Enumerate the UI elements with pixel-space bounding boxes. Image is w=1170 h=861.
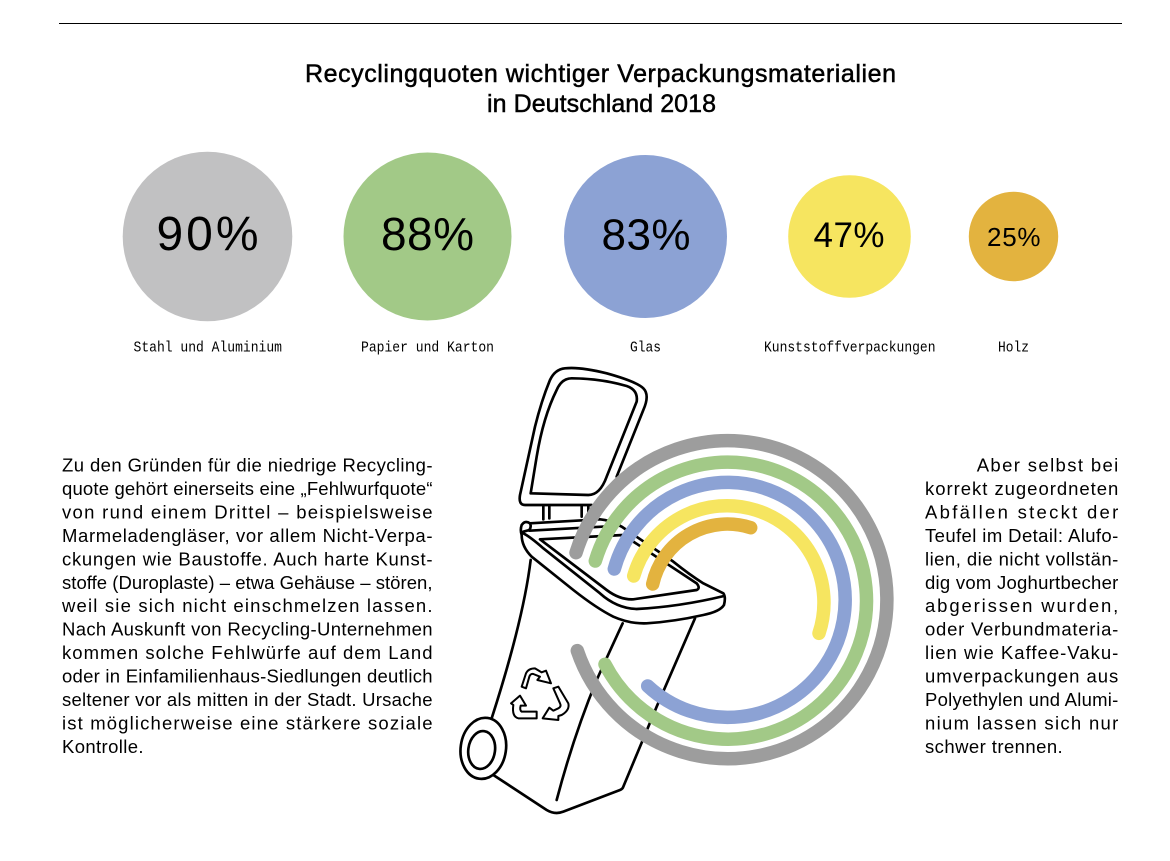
text block: right paragraph: umverpackungen aus xyxy=(925,666,1118,686)
text block: right paragraph: korrekt zugeordneten xyxy=(925,478,1118,499)
text block: left paragraph: weil sie sich nicht einschmelzen lassen. xyxy=(61,595,432,616)
circle: Kunststoffverpackungen 47% xyxy=(764,175,936,356)
text block: left paragraph: kommen solche Fehlwürfe auf dem Land xyxy=(62,642,432,663)
circle: Glas 83%: 83% xyxy=(602,210,690,260)
arc: Kunststoff 47% xyxy=(634,506,824,633)
text block: left paragraph: von rund einem Drittel – beispielsweise xyxy=(62,502,433,522)
bin rim xyxy=(521,519,725,623)
text block: left paragraph: Kontrolle. xyxy=(62,736,144,757)
icon: recycling symbol xyxy=(511,668,569,720)
text block: right paragraph: oder Verbundmateria- xyxy=(925,619,1118,640)
circle: Glas 83% xyxy=(564,155,727,356)
circle: Stahl und Aluminium 90% xyxy=(123,152,292,356)
text block: right paragraph: Teufel im Detail: Alufo- xyxy=(925,525,1118,546)
circle: Holz 25% xyxy=(969,192,1058,356)
text block: right paragraph xyxy=(925,455,1118,757)
text block: left paragraph: quote gehört einerseits eine „Fehlwurfquote“ xyxy=(62,478,432,499)
text block: left paragraph: stoffe (Duroplaste) – etwa Gehäuse – stören, xyxy=(62,572,432,593)
circle: Papier und Karton 88%: 88% xyxy=(381,208,474,260)
arc: Stahl und Aluminium 90% xyxy=(576,441,887,759)
text block: left paragraph: Zu den Gründen für die niedrige Recycling- xyxy=(62,455,432,476)
arc: Glas 83% xyxy=(614,482,845,717)
bin body xyxy=(492,560,695,813)
text block: left paragraph xyxy=(61,455,433,757)
text block: right paragraph: lien wie Kaffee-Vaku- xyxy=(925,642,1118,663)
text block: left paragraph: ist möglicherweise eine stärkere soziale xyxy=(62,712,432,733)
text block: left paragraph: oder in Einfamilienhaus-Siedlungen deutlich xyxy=(62,666,432,686)
text block: left paragraph: Marmeladengläser, vor allem Nicht-Verpa- xyxy=(62,525,432,546)
text block: left paragraph: ckungen wie Baustoffe. Auch harte Kunst- xyxy=(62,548,432,569)
panel: recycling rate circles xyxy=(123,152,1058,356)
title xyxy=(305,60,896,118)
circle: Stahl und Aluminium 90%: 90% xyxy=(156,208,258,261)
title: Recyclingquoten wichtiger Verpackungsmaterialien xyxy=(305,60,896,88)
text block: left paragraph: Nach Auskunft von Recycling-Unternehmen xyxy=(62,619,432,640)
circle: Kunststoffverpackungen 47%: Kunststoffverpackungen xyxy=(764,340,936,356)
circle: Stahl und Aluminium 90%: Stahl und Aluminium xyxy=(134,340,282,356)
arc: Papier und Karton 88% xyxy=(595,462,867,739)
bin lid open xyxy=(520,368,647,519)
text block: left paragraph: seltener vor als mitten in der Stadt. Ursache xyxy=(62,689,432,710)
text block: right paragraph: lien, die nicht vollstän- xyxy=(925,548,1118,569)
circle: Papier und Karton 88% xyxy=(344,152,512,356)
circle: Holz 25%: Holz xyxy=(998,340,1029,356)
icon: recycling bin xyxy=(457,368,725,813)
text block: right paragraph: Abfällen steckt der xyxy=(925,502,1118,522)
text block: right paragraph: Polyethylen und Alumi- xyxy=(925,689,1118,710)
text block: right paragraph: Aber selbst bei xyxy=(977,455,1118,476)
circle: Papier und Karton 88%: Papier und Karton xyxy=(361,340,494,356)
text block: right paragraph: dig vom Joghurtbecher xyxy=(925,572,1118,593)
circle: Kunststoffverpackungen 47%: 47% xyxy=(814,216,884,255)
text block: right paragraph: schwer trennen. xyxy=(925,736,1063,757)
circle: Holz 25%: 25% xyxy=(987,222,1040,252)
chart: concentric recycling arcs xyxy=(576,441,887,759)
title: in Deutschland 2018 xyxy=(487,90,716,118)
wheel xyxy=(457,715,510,782)
circle: Glas 83%: Glas xyxy=(630,340,661,356)
arc: Holz 25% xyxy=(653,524,751,584)
text block: right paragraph: nium lassen sich nur xyxy=(925,712,1118,733)
text block: right paragraph: abgerissen wurden, xyxy=(925,595,1118,616)
